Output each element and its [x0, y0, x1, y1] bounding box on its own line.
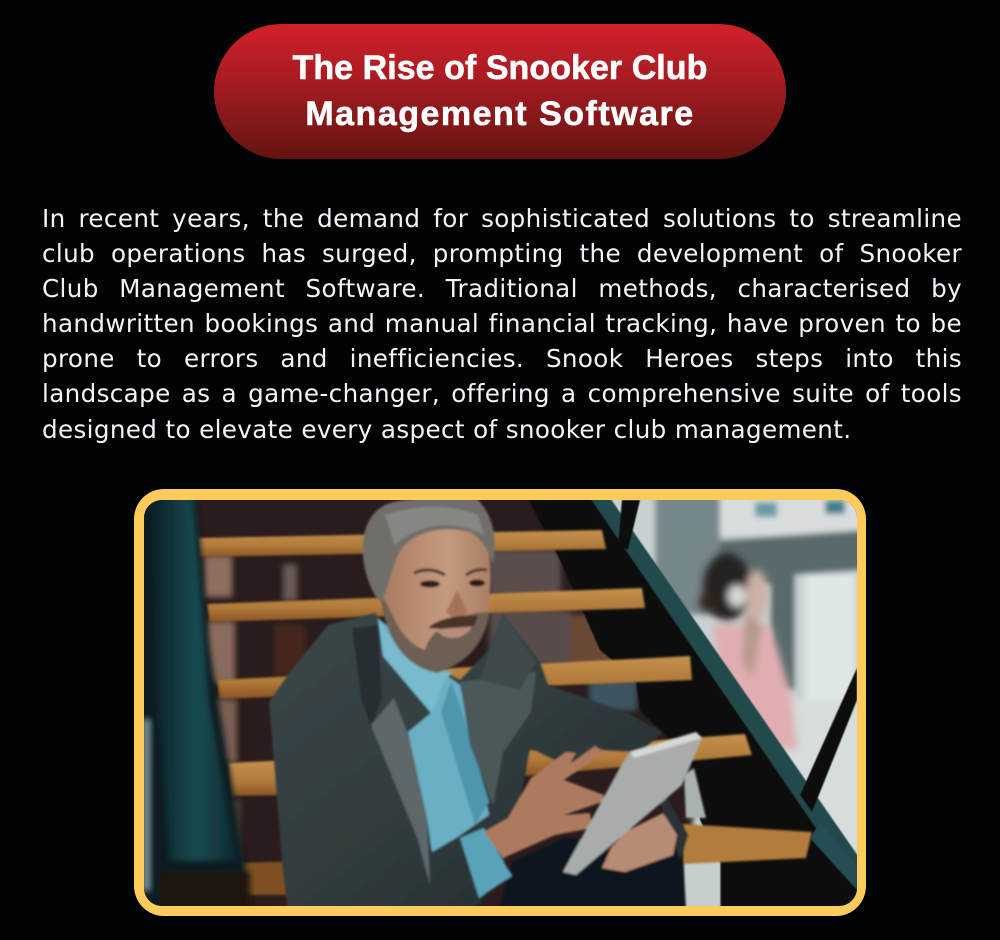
title line 2: Management Software — [305, 95, 695, 133]
intro paragraph: club operations has surged, prompting the development of Snooker — [42, 239, 962, 268]
right lapel — [460, 672, 536, 805]
tablet — [563, 732, 702, 875]
intro paragraph: landscape as a game-changer, offering a comprehensive suite of tools — [42, 379, 962, 408]
woman in background — [699, 553, 798, 750]
jacket — [269, 613, 663, 912]
left teal pillar — [140, 490, 250, 915]
intro paragraph: handwritten bookings and manual financial tracking, have proven to be — [42, 309, 962, 338]
title line 1: The Rise of Snooker Club — [293, 49, 707, 87]
left lapel — [352, 625, 382, 728]
intro paragraph: Club Management Software. Traditional methods, characterised by — [42, 274, 962, 303]
title pill — [214, 24, 786, 159]
right hand of man (gesturing fingers) — [484, 746, 604, 858]
background stairs wall — [130, 490, 870, 920]
intro paragraph: In recent years, the demand for sophisticated solutions to streamline — [42, 204, 962, 233]
intro paragraph — [42, 204, 962, 444]
beard — [380, 595, 489, 673]
bright window area — [610, 500, 857, 906]
photo frame — [134, 489, 866, 916]
eyes and brows — [420, 580, 440, 588]
lower background glimpses — [684, 768, 720, 912]
nose shadow — [446, 590, 468, 620]
man — [269, 497, 702, 912]
trousers — [500, 838, 686, 910]
intro paragraph: prone to errors and inefficiencies. Snook Heroes steps into this — [42, 344, 962, 373]
head — [382, 528, 492, 651]
black staircase stringer — [526, 495, 865, 915]
railing beams — [588, 495, 865, 895]
left hand of man (holding tablet) — [602, 813, 677, 872]
moustache and mouth — [428, 615, 478, 629]
intro paragraph: designed to elevate every aspect of snooker club management. — [42, 415, 851, 444]
shirt — [378, 618, 489, 852]
photo: businessman with tablet on wooden stairs — [144, 500, 857, 906]
wooden steps — [198, 530, 812, 895]
hair — [363, 497, 495, 600]
cuff — [460, 828, 512, 898]
